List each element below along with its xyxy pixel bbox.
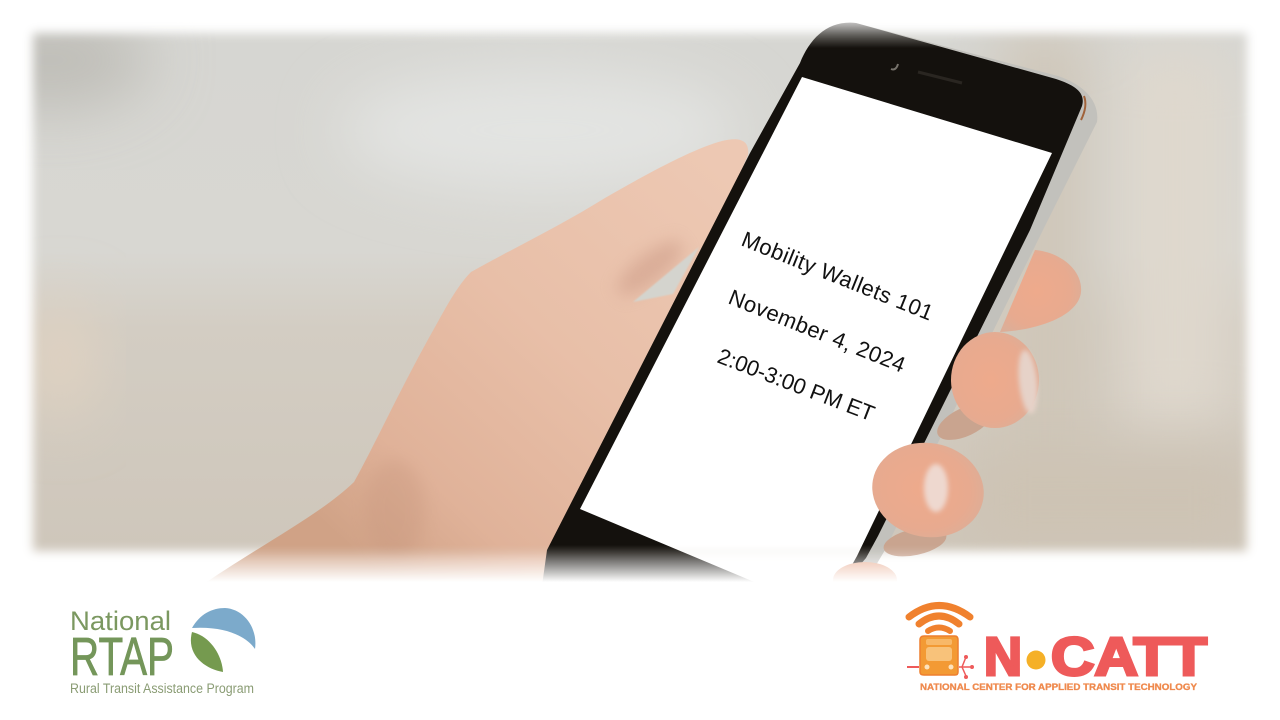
- thumb crease shading: [618, 240, 682, 296]
- logo mark: blue arc: [192, 608, 255, 649]
- speaker: [918, 72, 962, 83]
- back finger: [1000, 250, 1081, 332]
- word: RTAP: RTAP: [70, 627, 174, 687]
- logo: N-CATT: [907, 606, 1207, 692]
- phone black body: [540, 23, 1083, 600]
- lower palm sliver: [884, 532, 946, 556]
- gap between thumb and palm: [633, 247, 699, 302]
- event title: Mobility Wallets 101: [738, 226, 937, 325]
- camera: [891, 64, 898, 69]
- N-CATT tagline: NATIONAL CENTER FOR APPLIED TRANSIT TECHNOLOGY: [920, 682, 1197, 692]
- phone silver frame: [540, 23, 1097, 600]
- middle finger: [951, 332, 1039, 428]
- little finger: [834, 562, 896, 580]
- event date: November 4, 2024: [725, 284, 909, 377]
- photo background: [0, 10, 1260, 570]
- wrist shading: [386, 472, 413, 506]
- logo mark: green leaf: [191, 632, 223, 672]
- letters CATT: CATT: [1051, 627, 1207, 687]
- bus icon: [907, 636, 974, 679]
- letter N: N: [984, 627, 1022, 687]
- logo: National RTAP: [70, 606, 255, 696]
- phone edge highlight: [1081, 96, 1085, 120]
- phone screen text: [714, 226, 937, 426]
- wifi arcs: [909, 606, 970, 631]
- photo: hand holding phone: [195, 23, 1097, 600]
- ring finger nail: [924, 464, 948, 512]
- middle finger nail: [1016, 349, 1040, 415]
- word: National: National: [70, 606, 171, 636]
- hand and thumb: [195, 139, 748, 590]
- palm sliver next to phone: [937, 409, 984, 440]
- event time: 2:00-3:00 PM ET: [714, 343, 878, 426]
- phone screen: [580, 77, 1052, 597]
- ring finger: [872, 442, 984, 538]
- yellow dot: [1026, 650, 1046, 670]
- word: Rural Transit Assistance Program: Rural Transit Assistance Program: [70, 681, 254, 696]
